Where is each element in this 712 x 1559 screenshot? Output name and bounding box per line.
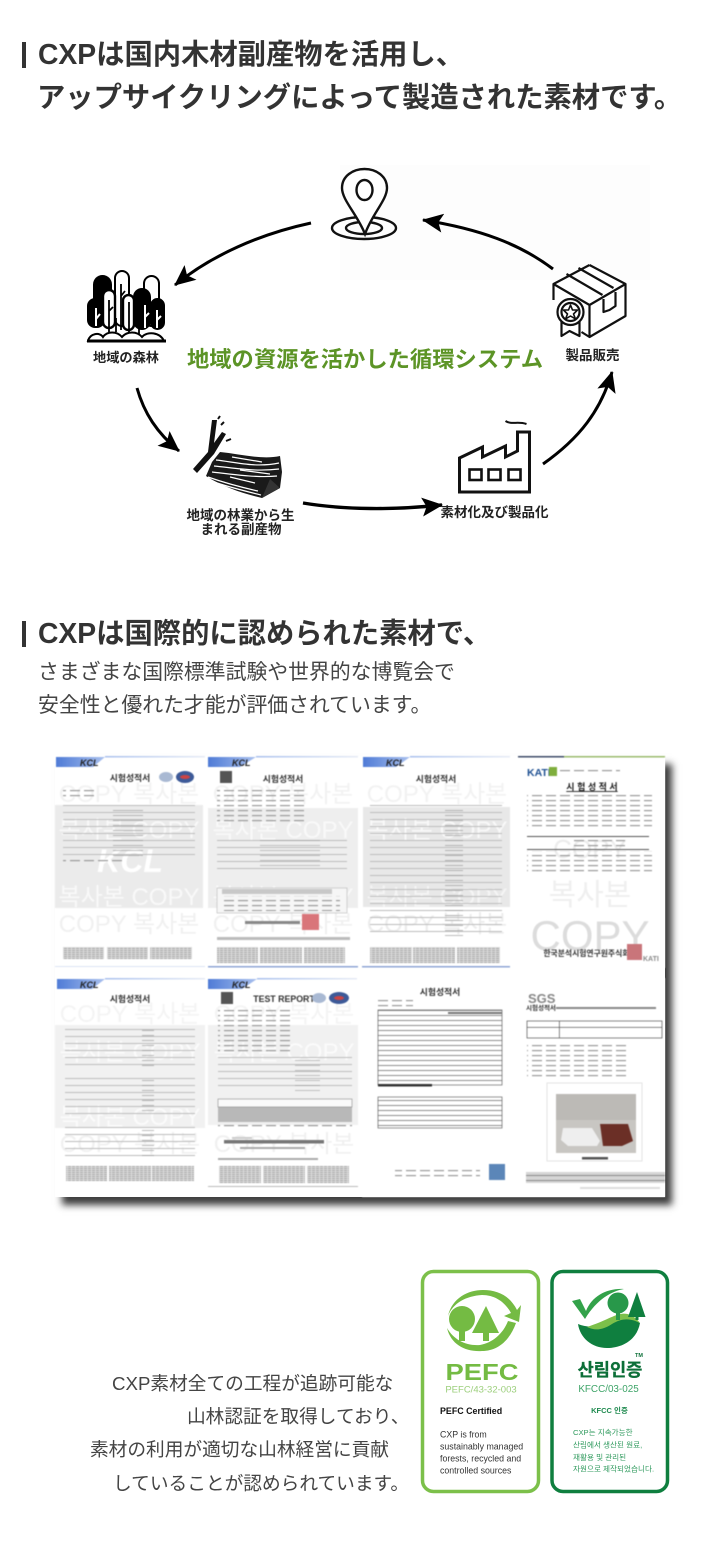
- card description: sustainably managed: [440, 1442, 523, 1452]
- document 5: KCL three-table report: 복사본 COPY: [60, 1039, 200, 1066]
- document 6: English test report: COPY 복사본: [214, 1001, 354, 1028]
- card description: controlled sources: [440, 1466, 512, 1476]
- arrow: forest to by-products: [137, 388, 179, 451]
- document 2: KCL report with stamp: COPY 복사본: [213, 911, 353, 938]
- document 1: KCL report: KCL: [80, 758, 98, 768]
- text block: forest certification: していることが認められています。: [113, 1473, 409, 1494]
- document 2: KCL report with stamp: COPY 복사본: [213, 781, 353, 808]
- label: by-products: [186, 507, 294, 537]
- icon: product box with badge: [554, 265, 626, 337]
- card description: [440, 1430, 523, 1476]
- heading: section 2: CXPは国際的に認められた素材で、: [38, 617, 491, 649]
- trademark: TM: [635, 1353, 643, 1359]
- document 2: KCL report with stamp: [208, 756, 358, 968]
- document 7: results tables with QR code: [362, 978, 517, 1197]
- card description: CXP는 지속가능한: [573, 1428, 633, 1437]
- document 5: KCL three-table report: [55, 978, 205, 1187]
- card description: forests, recycled and: [440, 1454, 521, 1464]
- document 3: KCL multi-row report: 복사본 COPY: [367, 884, 507, 911]
- document 1: KCL report: COPY 복사본: [59, 911, 199, 938]
- icon: location pin: [332, 169, 396, 239]
- card description: 자원으로 제작되었습니다.: [573, 1464, 654, 1474]
- document 5: KCL three-table report: COPY 복사본: [60, 1001, 200, 1028]
- label: materialization and productization: 素材化及び製品化: [440, 504, 549, 520]
- heading: section 1: アップサイクリングによって製造された素材です。: [37, 81, 682, 113]
- document 4: KATI report: KATI: [643, 956, 659, 963]
- document 4: KATI report: 시 험 성 적 서: [566, 781, 618, 792]
- document 1: KCL report: 시험성적서: [110, 772, 150, 783]
- card description: [573, 1428, 654, 1474]
- icon: KFCC logo: [572, 1289, 646, 1348]
- card title: KFCC 인증: [591, 1405, 628, 1415]
- document 7: results tables with QR code: 시험성적서: [420, 986, 460, 997]
- document 1: KCL report: KCL: [97, 843, 163, 879]
- document 4: KATI report: [517, 756, 665, 968]
- document 5: KCL three-table report: 복사본 COPY: [60, 1104, 200, 1131]
- arrow: materials to product sales: [543, 372, 612, 464]
- document 5: KCL three-table report: KCL: [80, 980, 98, 990]
- document 3: KCL multi-row report: 시험성적서: [416, 773, 456, 784]
- arrow: pin to forest: [175, 223, 311, 285]
- text block: international recognition: 安全性と優れた才能が評価されています。: [38, 694, 431, 717]
- document 4: KATI report: 복사본: [549, 879, 631, 912]
- icon: factory: [460, 421, 530, 492]
- text block: forest certification: 山林認証を取得しており、: [187, 1406, 409, 1427]
- document 6: English test report: COPY 복사본: [214, 1131, 354, 1158]
- text block: forest certification: 素材の利用が適切な山林経営に貢献: [90, 1439, 389, 1460]
- document 6: English test report: KCL: [232, 980, 250, 990]
- document 2: KCL report with stamp: 복사본 COPY: [213, 884, 353, 911]
- document 8: SGS report with tray photo: [517, 978, 665, 1197]
- document 6: English test report: TEST REPORT: [253, 994, 315, 1004]
- document 4: KATI report: COPY: [553, 834, 627, 864]
- text block: international recognition: さまざまな国際標準試験や世界的な博覧会で: [38, 661, 455, 684]
- document 6: English test report: 복사본 COPY: [214, 1039, 354, 1066]
- document 3: KCL multi-row report: 복사본 COPY: [367, 817, 507, 844]
- label: by-products: 地域の林業から生: [186, 507, 294, 523]
- heading: section 1: [22, 38, 682, 113]
- document 6: English test report: [208, 978, 358, 1187]
- license code: PEFC/43-32-003: [445, 1384, 517, 1396]
- document 2: KCL report with stamp: 시험성적서: [263, 773, 303, 784]
- card title: PEFC Certified: [440, 1406, 502, 1416]
- label: by-products: まれる副産物: [200, 521, 282, 537]
- document 3: KCL multi-row report: KCL: [386, 758, 404, 768]
- label: product sales: 製品販売: [566, 347, 620, 363]
- document 2: KCL report with stamp: 복사본 COPY: [213, 817, 353, 844]
- icon: forest trees: [87, 271, 166, 342]
- diagram: regional resource circulation cycle: [86, 168, 627, 537]
- document 2: KCL report with stamp: KCL: [232, 758, 250, 768]
- document 3: KCL multi-row report: [362, 756, 511, 968]
- document 4: KATI report: KATI: [527, 767, 551, 779]
- card description: CXP is from: [440, 1430, 487, 1440]
- document 8: SGS report with tray photo: SGS: [528, 991, 556, 1006]
- card description: 재활용 및 관리된: [573, 1452, 626, 1462]
- document 3: KCL multi-row report: COPY 복사본: [367, 781, 507, 808]
- license code: KFCC/03-025: [578, 1384, 639, 1395]
- document 8: SGS report with tray photo: 시험성적서: [526, 1003, 556, 1012]
- document 3: KCL multi-row report: COPY 복사본: [367, 911, 507, 938]
- document 4: KATI report: 한국분석시험연구원주식회사: [543, 948, 637, 958]
- arrow: by-products to materials: [303, 503, 442, 509]
- text block: international recognition: [38, 660, 455, 717]
- heading: section 1: CXPは国内木材副産物を活用し、: [38, 38, 464, 70]
- icon: by-product branches and logs: [193, 416, 282, 498]
- document 1: KCL report: 복사본 COPY: [59, 884, 199, 911]
- card description: 산림에서 생산된 원료,: [573, 1440, 642, 1450]
- logo text: PEFC: PEFC: [446, 1359, 518, 1385]
- document 5: KCL three-table report: COPY 복사본: [60, 1131, 200, 1158]
- arrow: product sales to pin: [423, 220, 553, 269]
- document 4: KATI report: COPY: [530, 912, 650, 959]
- document 5: KCL three-table report: 시험성적서: [110, 993, 150, 1004]
- label: regional forest: 地域の森林: [93, 349, 159, 365]
- document 1: KCL report: 복사본 COPY: [59, 817, 199, 844]
- document 1: KCL report: [55, 756, 205, 968]
- text block: forest certification: [90, 1373, 409, 1494]
- logo text: forest certification: 산림인증: [578, 1360, 642, 1380]
- title: center label: 地域の資源を活かした循環システム: [187, 347, 543, 372]
- text block: forest certification: CXP素材全ての工程が追跡可能な: [112, 1373, 393, 1394]
- icon: PEFC logo: [447, 1290, 521, 1351]
- document 1: KCL report: COPY 복사본: [59, 781, 199, 808]
- panel: test report documents: [55, 756, 665, 1197]
